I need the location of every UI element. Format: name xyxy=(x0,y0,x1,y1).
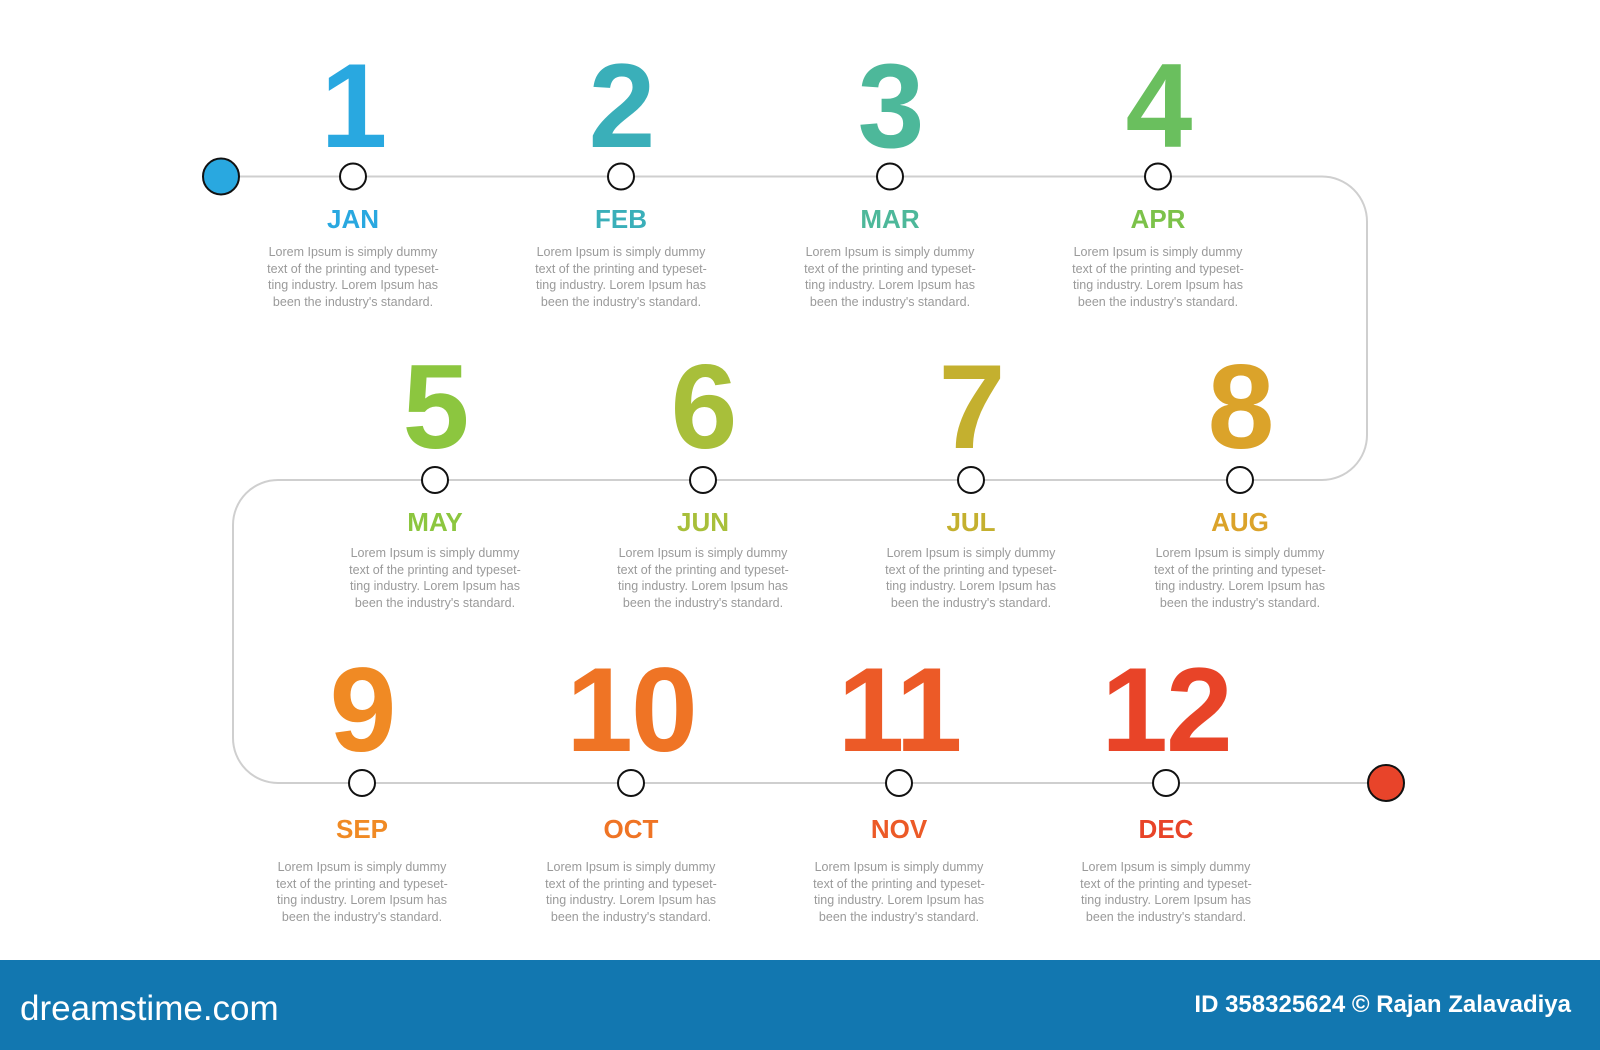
item JUN xyxy=(617,340,789,610)
text: JUN xyxy=(677,507,729,537)
text: FEB xyxy=(595,204,647,234)
text: Lorem Ipsum is simply dummy xyxy=(887,546,1055,560)
text: ting industry. Lorem Ipsum has xyxy=(268,278,438,292)
text: Lorem Ipsum is simply dummy xyxy=(1082,860,1250,874)
item JAN xyxy=(267,39,439,308)
text: Lorem Ipsum is simply dummy xyxy=(351,546,519,560)
text: APR xyxy=(1131,204,1185,234)
text: JUL xyxy=(946,507,996,537)
text: Lorem Ipsum is simply dummy xyxy=(537,245,705,259)
text: been the industry's standard. xyxy=(810,294,970,308)
text: text of the printing and typeset- xyxy=(1080,876,1252,890)
text: 1 xyxy=(321,39,385,173)
text: ting industry. Lorem Ipsum has xyxy=(536,278,706,292)
text: been the industry's standard. xyxy=(551,910,711,924)
text: text of the printing and typeset- xyxy=(276,876,448,890)
text: ting industry. Lorem Ipsum has xyxy=(350,579,520,593)
text: 6 xyxy=(671,340,735,474)
item FEB xyxy=(535,39,707,308)
text: Lorem Ipsum is simply dummy xyxy=(1074,245,1242,259)
text: text of the printing and typeset- xyxy=(804,262,976,276)
text: been the industry's standard. xyxy=(1086,910,1246,924)
text: been the industry's standard. xyxy=(891,596,1051,610)
text: Lorem Ipsum is simply dummy xyxy=(547,860,715,874)
footer credit: ID 358325624 © Rajan Zalavadiya xyxy=(1194,991,1571,1018)
text: 7 xyxy=(939,340,1003,474)
text: 9 xyxy=(330,643,394,777)
text: OCT xyxy=(604,814,658,844)
text: NOV xyxy=(871,814,927,844)
item NOV xyxy=(813,643,985,924)
text: ting industry. Lorem Ipsum has xyxy=(1081,893,1251,907)
item AUG xyxy=(1154,340,1326,610)
item OCT xyxy=(545,643,717,924)
text: text of the printing and typeset- xyxy=(535,262,707,276)
text: text of the printing and typeset- xyxy=(1072,262,1244,276)
text: 3 xyxy=(858,39,922,173)
text: ting industry. Lorem Ipsum has xyxy=(546,893,716,907)
text: been the industry's standard. xyxy=(282,910,442,924)
text: ting industry. Lorem Ipsum has xyxy=(805,278,975,292)
item APR xyxy=(1072,39,1244,308)
text: DEC xyxy=(1139,814,1193,844)
text: Lorem Ipsum is simply dummy xyxy=(269,245,437,259)
text: JAN xyxy=(327,204,379,234)
item DEC xyxy=(1080,643,1252,924)
text: ting industry. Lorem Ipsum has xyxy=(277,893,447,907)
text: ting industry. Lorem Ipsum has xyxy=(1073,278,1243,292)
text: 5 xyxy=(403,340,467,474)
text: ting industry. Lorem Ipsum has xyxy=(814,893,984,907)
text: text of the printing and typeset- xyxy=(349,562,521,576)
text: SEP xyxy=(336,814,388,844)
text: 2 xyxy=(589,39,653,173)
text: been the industry's standard. xyxy=(1160,596,1320,610)
text: text of the printing and typeset- xyxy=(813,876,985,890)
text: text of the printing and typeset- xyxy=(267,262,439,276)
item JUL xyxy=(885,340,1057,610)
text: MAY xyxy=(407,507,463,537)
text: text of the printing and typeset- xyxy=(545,876,717,890)
text: 12 xyxy=(1101,643,1231,777)
item MAR xyxy=(804,39,976,308)
text: been the industry's standard. xyxy=(819,910,979,924)
text: been the industry's standard. xyxy=(273,294,433,308)
text: text of the printing and typeset- xyxy=(617,562,789,576)
text: 10 xyxy=(566,643,696,777)
text: been the industry's standard. xyxy=(623,596,783,610)
text: 8 xyxy=(1208,340,1272,474)
text: AUG xyxy=(1211,507,1269,537)
item SEP xyxy=(276,643,448,924)
text: text of the printing and typeset- xyxy=(1154,562,1326,576)
text: 11 xyxy=(838,643,960,777)
text: Lorem Ipsum is simply dummy xyxy=(278,860,446,874)
text: ting industry. Lorem Ipsum has xyxy=(618,579,788,593)
text: text of the printing and typeset- xyxy=(885,562,1057,576)
text: MAR xyxy=(860,204,920,234)
text: Lorem Ipsum is simply dummy xyxy=(815,860,983,874)
text: 4 xyxy=(1126,39,1190,173)
footer bar xyxy=(0,960,1600,1050)
footer logo: dreamstime.com xyxy=(20,989,279,1028)
text: been the industry's standard. xyxy=(355,596,515,610)
item MAY xyxy=(349,340,521,610)
text: been the industry's standard. xyxy=(1078,294,1238,308)
text: Lorem Ipsum is simply dummy xyxy=(806,245,974,259)
text: Lorem Ipsum is simply dummy xyxy=(619,546,787,560)
text: ting industry. Lorem Ipsum has xyxy=(886,579,1056,593)
text: ting industry. Lorem Ipsum has xyxy=(1155,579,1325,593)
text: Lorem Ipsum is simply dummy xyxy=(1156,546,1324,560)
text: been the industry's standard. xyxy=(541,294,701,308)
